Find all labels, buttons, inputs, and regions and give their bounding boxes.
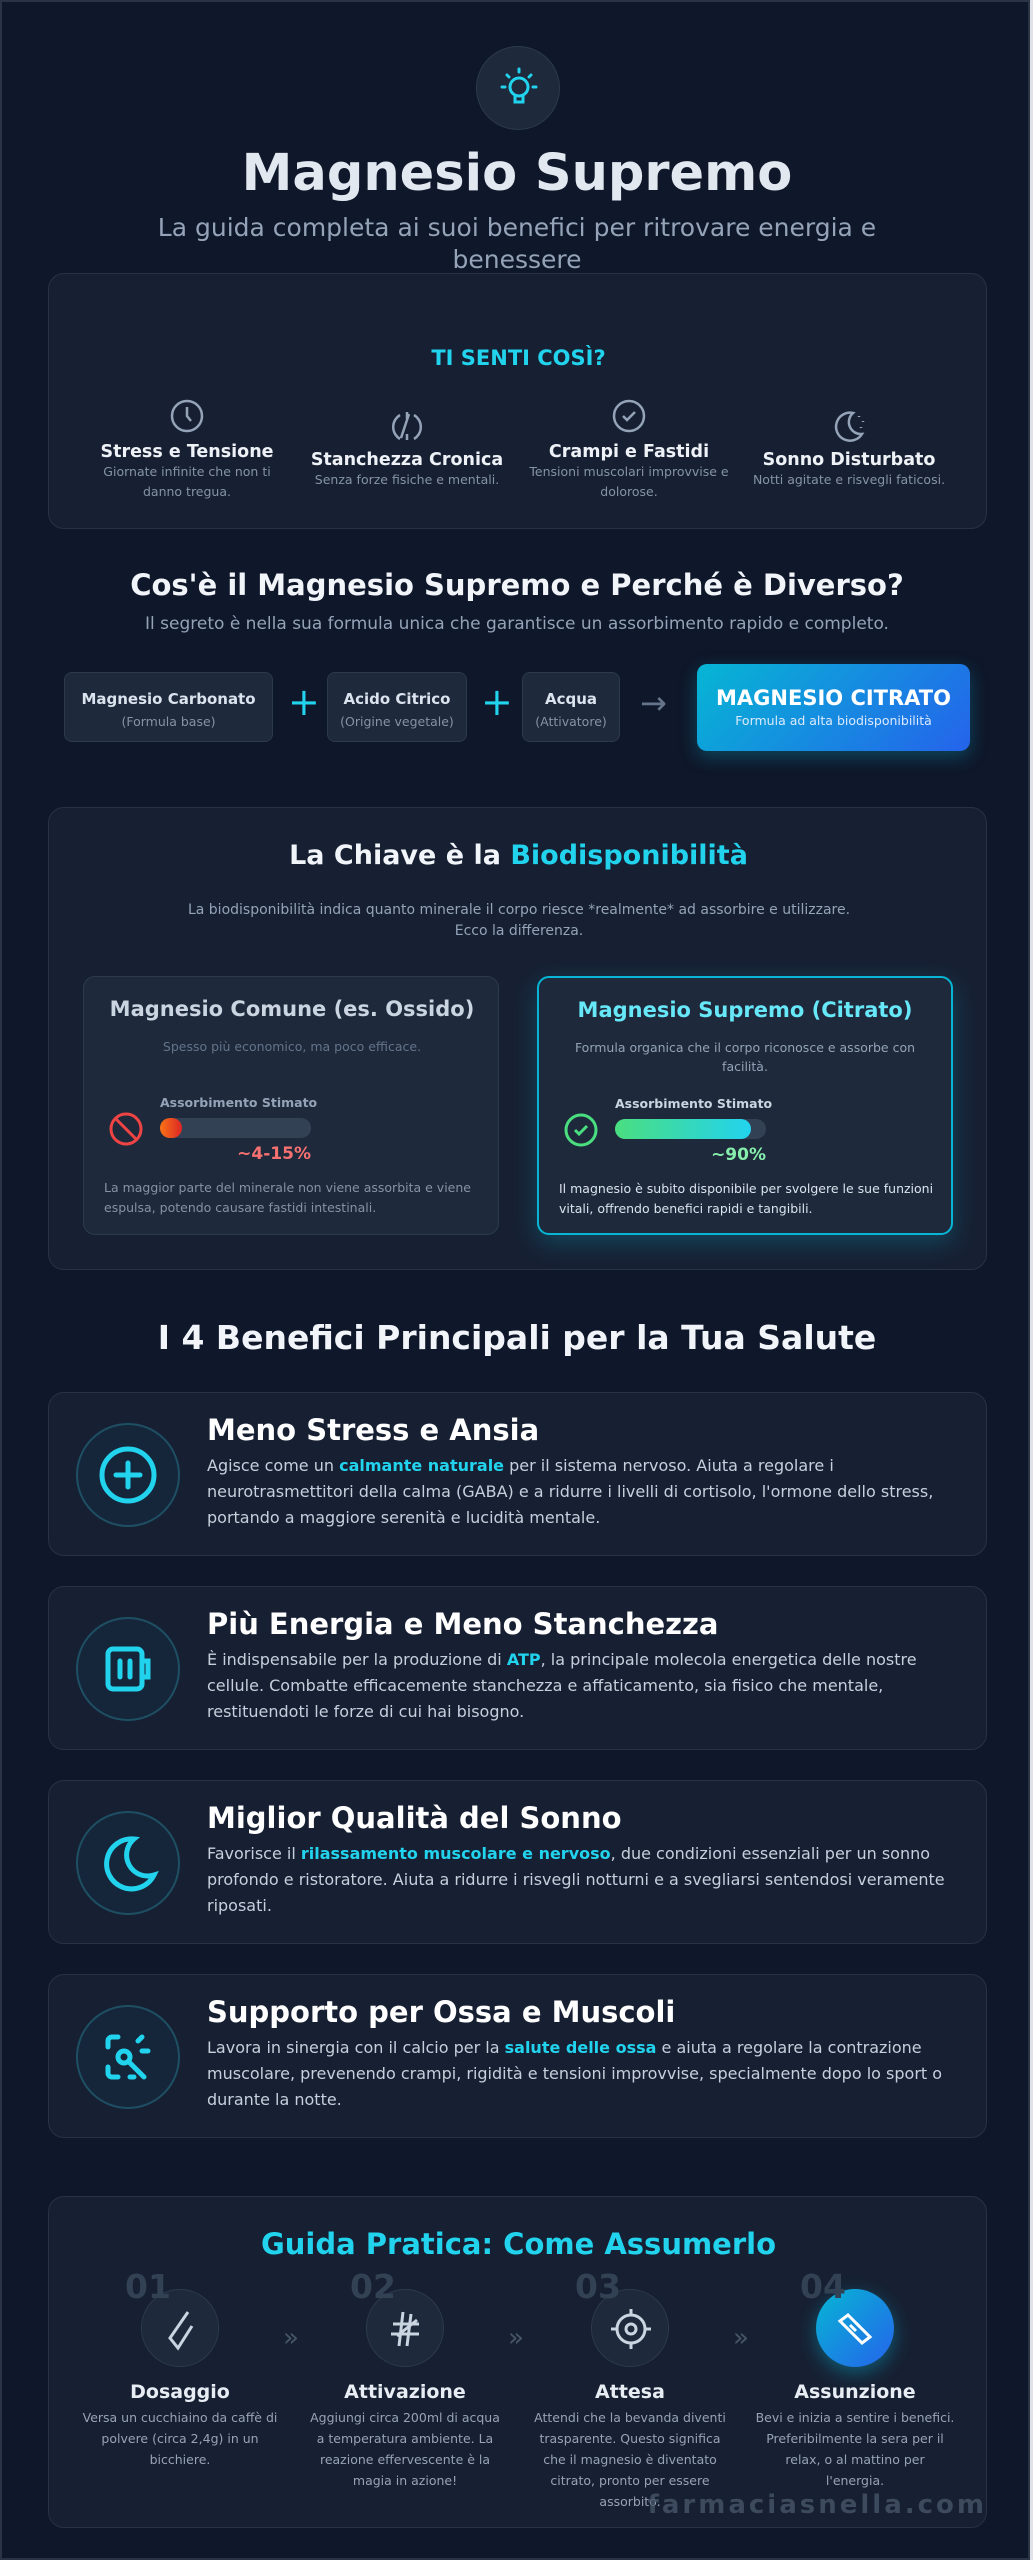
panel: guide: Bevi e inizia a sentire i benefici. Preferibilmente la sera per il relax, o al mattino per l'energia. [756, 2410, 954, 2488]
benefit: bones: Lavora in sinergia con il calcio per la salute delle ossa e aiuta a regolare la contrazione muscolare, prevenendo crampi, rigidità e tensioni improvvise, specialmente dopo lo sport o durante la notte. [207, 2038, 942, 2109]
symptom: cramps [529, 400, 729, 499]
benefit: stress: Meno Stress e Ansia [207, 1413, 539, 1447]
formula row [64, 662, 978, 765]
symptom: stress: Stress e Tensione [100, 442, 274, 462]
panel: guide: 02 [350, 2267, 396, 2306]
panel: guide: Attivazione [344, 2381, 466, 2403]
card: supreme: Assorbimento Stimato [615, 1096, 772, 1111]
card: common: La maggior parte del minerale non viene assorbita e viene espulsa, potendo causare fastidi intestinali. [104, 1180, 471, 1215]
box: citrato [697, 664, 970, 751]
card: supreme: ~90% [711, 1145, 766, 1165]
icon: muscle [76, 2005, 180, 2109]
benefit: bones [48, 1974, 987, 2138]
description [188, 902, 850, 939]
benefit: energy: È indispensabile per la produzione di ATP, la principale molecola energetica delle nostre cellule. Combatte efficacemente stanchezza e affaticamento, sia fisico che mentale, restituendoti le forze di cui hai bisogno. [207, 1650, 917, 1721]
heading: TI SENTI COSÌ? [431, 346, 606, 370]
box: acido [327, 672, 467, 742]
icon: plus circle [76, 1423, 180, 1527]
arrow: → [640, 684, 667, 722]
benefit: sleep: Miglior Qualità del Sonno [207, 1801, 622, 1835]
bar: high [615, 1119, 766, 1139]
panel: guide: 04 [800, 2267, 846, 2306]
box: acido: (Origine vegetale) [340, 714, 454, 729]
bar: low [160, 1118, 311, 1138]
step 1 [82, 2267, 277, 2467]
panel: guide: Versa un cucchiaino da caffè di polvere (circa 2,4g) in un bicchiere. [83, 2410, 277, 2467]
box: acqua [522, 672, 620, 742]
benefit: bones: Supporto per Ossa e Muscoli [207, 1995, 675, 2029]
plus: + [288, 680, 320, 724]
plus: + [481, 680, 513, 724]
symptom: stress [100, 400, 274, 499]
box: acqua: (Attivatore) [535, 714, 607, 729]
symptom: sleep [753, 411, 945, 487]
icon: moon [76, 1811, 180, 1915]
heading: benefits: I 4 Benefici Principali per la Tua Salute [158, 1318, 876, 1357]
box: citrato: Formula ad alta biodisponibilità [735, 713, 932, 728]
arrow: » [508, 2323, 524, 2353]
panel: guide: Aggiungi circa 200ml di acqua a temperatura ambiente. La reazione effervescente è la magia in azione! [310, 2410, 500, 2488]
description: La biodisponibilità indica quanto minerale il corpo riesce *realmente* ad assorbire e utilizzare. [188, 902, 850, 918]
icon: check [564, 1114, 598, 1146]
symptom: cramps: Tensioni muscolari improvvise e dolorose. [529, 464, 729, 499]
arrow: » [283, 2323, 299, 2353]
step 3 [534, 2267, 726, 2509]
box: carbonato: Magnesio Carbonato [81, 690, 256, 708]
heading: Guida Pratica: Come Assumerlo [261, 2227, 776, 2261]
card: common: Spesso più economico, ma poco efficace. [163, 1039, 421, 1054]
subheading: Il segreto è nella sua formula unica che garantisce un assorbimento rapido e completo. [145, 614, 889, 634]
benefit: energy: Più Energia e Meno Stanchezza [207, 1607, 718, 1641]
panel: guide: Attesa [595, 2381, 665, 2403]
icon: battery [76, 1617, 180, 1721]
step 4 [756, 2267, 954, 2488]
box: acqua: Acqua [545, 690, 597, 708]
panel: guide: Assunzione [794, 2381, 916, 2403]
symptom: sleep: Sonno Disturbato [763, 450, 935, 470]
symptom: fatigue [311, 412, 503, 487]
step 2 [310, 2267, 500, 2488]
card: common: Assorbimento Stimato [160, 1095, 317, 1110]
benefit: stress: Agisce come un calmante naturale per il sistema nervoso. Aiuta a regolare i neurotrasmettitori della calma (GABA) e a ridurre i livelli di cortisolo, l'ormone dello stress, portando a maggiore serenità e lucidità mentale. [207, 1456, 933, 1527]
panel: guide: 01 [125, 2267, 171, 2306]
symptom: sleep: Notti agitate e risvegli faticosi. [753, 472, 945, 487]
symptom: fatigue: Senza forze fisiche e mentali. [315, 472, 499, 487]
benefit: sleep [48, 1780, 987, 1944]
benefit: sleep: Favorisce il rilassamento muscolare e nervoso, due condizioni essenziali per un sonno profondo e ristoratore. Aiuta a ridurre i risvegli notturni e a svegliarsi sentendosi veramente riposati. [207, 1844, 945, 1915]
arrow: » [733, 2323, 749, 2353]
box: citrato: MAGNESIO CITRATO [716, 686, 951, 710]
panel: guide: Attendi che la bevanda diventi trasparente. Questo significa che il magnesio è diventato citrato, pronto per essere assorbito. [534, 2410, 726, 2509]
panel: guide: Dosaggio [130, 2381, 230, 2403]
card: supreme [537, 976, 953, 1235]
card: common: Magnesio Comune (es. Ossido) [110, 997, 474, 1021]
benefit: stress [48, 1392, 987, 1556]
box: acido: Acido Citrico [344, 690, 450, 708]
icon: lightbulb [476, 46, 560, 130]
symptom: cramps: Crampi e Fastidi [549, 442, 709, 462]
panel: guide: 03 [575, 2267, 621, 2306]
watermark: farmaciasnella.com [648, 2490, 987, 2520]
heading: La Chiave è la Biodisponibilità [289, 840, 748, 871]
card: supreme: Magnesio Supremo (Citrato) [578, 998, 912, 1022]
panel: bioavailability [48, 807, 987, 1270]
card: supreme: Formula organica che il corpo riconosce e assorbe con facilità. [575, 1040, 915, 1074]
subtitle: La guida completa ai suoi benefici per ritrovare energia e benessere [158, 213, 876, 274]
box: carbonato [64, 672, 273, 742]
icon: forbidden [110, 1112, 142, 1146]
heading: what is: Cos'è il Magnesio Supremo e Perché è Diverso? [130, 568, 904, 602]
card: common [83, 976, 499, 1235]
symptom: stress: Giornate infinite che non ti danno tregua. [103, 464, 271, 499]
card: common: ~4-15% [237, 1144, 311, 1164]
box: carbonato: (Formula base) [121, 714, 216, 729]
description: Ecco la differenza. [455, 923, 583, 939]
title: Magnesio Supremo [242, 144, 792, 203]
panel: symptoms [48, 273, 987, 529]
symptom: fatigue: Stanchezza Cronica [311, 450, 503, 470]
panel: guide [48, 2196, 987, 2528]
benefit: energy [48, 1586, 987, 1750]
card: supreme: Il magnesio è subito disponibile per svolgere le sue funzioni vitali, offrendo benefici rapidi e tangibili. [559, 1181, 933, 1216]
